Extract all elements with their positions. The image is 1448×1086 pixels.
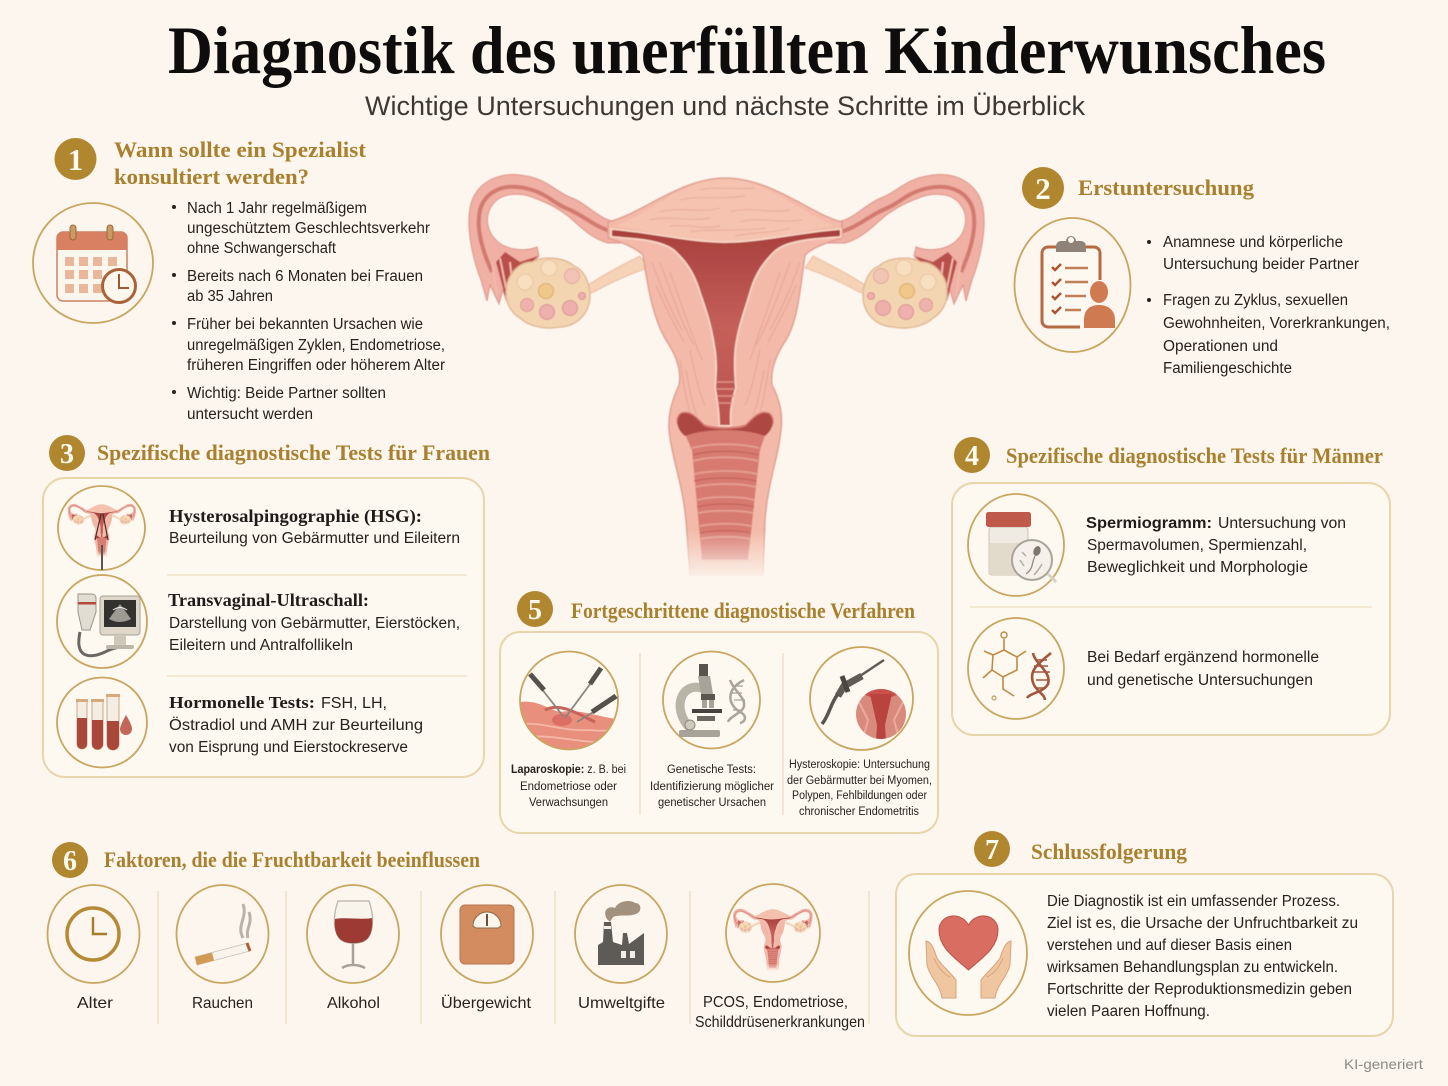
text: semen analysis: Spermiogramm: xyxy=(1086,515,1212,532)
factor: overweight xyxy=(441,885,533,1012)
heading 1: Wann sollte ein Spezialist xyxy=(114,137,367,162)
factor: alcohol xyxy=(307,885,399,1012)
badge 2: 2 xyxy=(1035,171,1051,206)
panel: tests for women xyxy=(43,478,484,777)
badge 4 xyxy=(954,437,990,473)
badge 7 xyxy=(974,831,1010,867)
badge 1 xyxy=(54,138,96,180)
text: laparoscopy xyxy=(511,764,626,809)
badge 6: 6 xyxy=(63,846,77,877)
text: conclusion: Die Diagnostik ist ein umfassender Prozess. xyxy=(1047,893,1340,910)
icon: ultrasound xyxy=(57,575,147,668)
bullet list 2: Anamnese und körperliche xyxy=(1163,234,1343,251)
bullet list 1: unregelmäßigen Zyklen, Endometriose, xyxy=(187,337,445,354)
text: laparoscopy: Verwachsungen xyxy=(529,797,608,809)
badge 1: 1 xyxy=(68,142,83,177)
badge 5 xyxy=(517,591,553,627)
text: genetic tests: Identifizierung möglicher xyxy=(650,781,774,793)
text: hormonal and genetic: und genetische Untersuchungen xyxy=(1087,672,1313,689)
subtitle: Wichtige Untersuchungen und nächste Schritte im Überblick xyxy=(365,91,1085,121)
badge 6 xyxy=(52,842,88,878)
bullet list 2: Gewohnheiten, Vorerkrankungen, xyxy=(1163,315,1390,332)
text: transvaginal ultrasound xyxy=(168,590,460,654)
text: hysteroscopy: chronischer Endometritis xyxy=(799,806,919,818)
bullet list 1: ab 35 Jahren xyxy=(187,288,273,305)
text: semen analysis: Spermavolumen, Spermienzahl, xyxy=(1087,537,1307,554)
panel: tests for men xyxy=(952,483,1390,735)
text: hysteroscopy: Polypen, Fehlbildungen oder xyxy=(792,790,927,802)
title: Diagnostik des unerfüllten Kinderwunsches xyxy=(168,12,1326,88)
text: genetic tests: genetischer Ursachen xyxy=(658,797,766,809)
factor: medical conditions: Schilddrüsenerkrankungen xyxy=(695,1014,865,1031)
text: hormone tests xyxy=(169,693,423,756)
bullet list 2: Familiengeschichte xyxy=(1163,360,1292,377)
bullet list 2 xyxy=(1147,234,1390,377)
factor: environmental toxins xyxy=(575,885,667,1012)
factor: smoking: Rauchen xyxy=(192,995,253,1012)
heading 3: Spezifische diagnostische Tests für Frauen xyxy=(97,440,490,465)
central anatomy illustration: uterus xyxy=(469,175,984,582)
text: hysterosalpingography: Hysterosalpingographie (HSG): xyxy=(169,506,422,527)
bullet list 1: Bereits nach 6 Monaten bei Frauen xyxy=(187,268,423,285)
text: transvaginal ultrasound: Transvaginal-Ultraschall: xyxy=(168,590,369,610)
badge 7: 7 xyxy=(985,835,999,866)
text: hormone tests: FSH, LH, xyxy=(321,695,387,712)
bullet list 1: ohne Schwangerschaft xyxy=(187,240,337,257)
icon: clipboard and patient xyxy=(1014,218,1130,352)
factor: age: Alter xyxy=(77,995,114,1012)
bullet list 1: früheren Eingriffen oder höherem Alter xyxy=(187,357,445,374)
bullet list 1: ungeschütztem Geschlechtsverkehr xyxy=(187,220,430,237)
text: conclusion xyxy=(1046,893,1358,1020)
icon: blood test tubes xyxy=(57,678,147,768)
heading 6: Faktoren, die die Fruchtbarkeit beeinflussen xyxy=(104,847,480,872)
text: genetic tests xyxy=(650,764,774,809)
bullet list 1: Wichtig: Beide Partner sollten xyxy=(187,385,386,402)
icon: hormone molecule and DNA xyxy=(968,618,1064,719)
section 1: when to consult a specialist xyxy=(33,137,445,423)
text: hormone tests: von Eisprung und Eierstockreserve xyxy=(169,739,408,756)
section 5: advanced procedures xyxy=(500,591,938,833)
factor: medical conditions xyxy=(695,884,865,1031)
text: semen analysis: Untersuchung von xyxy=(1218,515,1346,532)
text: conclusion: Ziel ist es, die Ursache der Unfruchtbarkeit zu xyxy=(1047,915,1358,932)
heading 2: Erstuntersuchung xyxy=(1078,175,1254,200)
text: semen analysis xyxy=(1086,515,1346,576)
factor: medical conditions: PCOS, Endometriose, xyxy=(703,994,848,1011)
panel: conclusion xyxy=(896,874,1393,1036)
bullet list 1 xyxy=(172,200,445,423)
section 2: initial examination xyxy=(1014,167,1390,377)
bullet list 1: Früher bei bekannten Ursachen wie xyxy=(187,316,423,333)
icon: heart in hands xyxy=(909,891,1027,1015)
factor: alcohol: Alkohol xyxy=(327,995,380,1012)
factor: age xyxy=(48,885,140,1012)
section 6: factors influencing fertility xyxy=(48,842,869,1031)
badge 2 xyxy=(1022,167,1064,209)
text: laparoscopy: Endometriose oder xyxy=(520,781,617,793)
badge 4: 4 xyxy=(965,441,979,472)
icon: hysteroscopy xyxy=(810,647,913,750)
text: hysteroscopy: Hysteroskopie: Untersuchung xyxy=(789,759,930,771)
text: hormonal and genetic xyxy=(1087,649,1319,689)
text: transvaginal ultrasound: Darstellung von Gebärmutter, Eierstöcken, xyxy=(169,615,460,632)
factor: overweight: Übergewicht xyxy=(441,994,532,1012)
text: conclusion: wirksamen Behandlungsplan zu entwickeln. xyxy=(1046,959,1338,976)
heading 5: Fortgeschrittene diagnostische Verfahren xyxy=(571,598,915,623)
text: laparoscopy: Laparoskopie: z. B. bei xyxy=(511,764,626,776)
text: genetic tests: Genetische Tests: xyxy=(667,764,756,776)
bullet list 2: Fragen zu Zyklus, sexuellen xyxy=(1163,292,1348,309)
text: conclusion: verstehen und auf dieser Basis einen xyxy=(1047,937,1292,954)
heading 4: Spezifische diagnostische Tests für Männer xyxy=(1006,443,1383,468)
heading 1: konsultiert werden? xyxy=(114,164,309,189)
text: conclusion: vielen Paaren Hoffnung. xyxy=(1047,1003,1210,1020)
text: semen analysis: Beweglichkeit und Morphologie xyxy=(1087,559,1308,576)
text: hormone tests: Hormonelle Tests: xyxy=(169,693,315,712)
bullet list 2: Untersuchung beider Partner xyxy=(1163,256,1359,273)
bullet list 2: Operationen und xyxy=(1163,338,1278,355)
bullet list 1: untersucht werden xyxy=(187,406,313,423)
factor: environmental toxins: Umweltgifte xyxy=(578,995,665,1012)
badge 5: 5 xyxy=(528,595,542,626)
text: hysterosalpingography xyxy=(169,506,460,547)
text: hysteroscopy: der Gebärmutter bei Myomen, xyxy=(787,775,932,787)
icon: microscope and DNA xyxy=(663,652,760,748)
text: hysteroscopy xyxy=(787,759,932,818)
icon: hysterosalpingography xyxy=(58,486,145,570)
icon: calendar with clock xyxy=(33,203,153,323)
text: hormone tests: Östradiol und AMH zur Beurteilung xyxy=(169,716,423,734)
heading 1 xyxy=(114,137,367,189)
heading 7: Schlussfolgerung xyxy=(1031,839,1187,864)
section 7: conclusion xyxy=(896,831,1393,1036)
icon: laparoscopy xyxy=(519,650,619,750)
badge 3: 3 xyxy=(60,439,74,470)
section 4: specific tests for men xyxy=(952,437,1390,735)
badge 3 xyxy=(49,435,85,471)
icon: sample jar with sperm xyxy=(968,494,1064,596)
text: transvaginal ultrasound: Eileitern und Antralfollikeln xyxy=(169,637,353,654)
panel: advanced procedures xyxy=(500,632,938,833)
text: hormonal and genetic: Bei Bedarf ergänzend hormonelle xyxy=(1087,649,1319,666)
AI-generated note: KI-generiert xyxy=(1344,1056,1423,1072)
bullet list 1: Nach 1 Jahr regelmäßigem xyxy=(187,200,367,217)
factor: smoking xyxy=(176,885,268,1012)
text: hysterosalpingography: Beurteilung von Gebärmutter und Eileitern xyxy=(169,530,460,547)
text: conclusion: Fortschritte der Reproduktionsmedizin geben xyxy=(1047,981,1352,998)
section 3: specific tests for women xyxy=(43,435,490,777)
